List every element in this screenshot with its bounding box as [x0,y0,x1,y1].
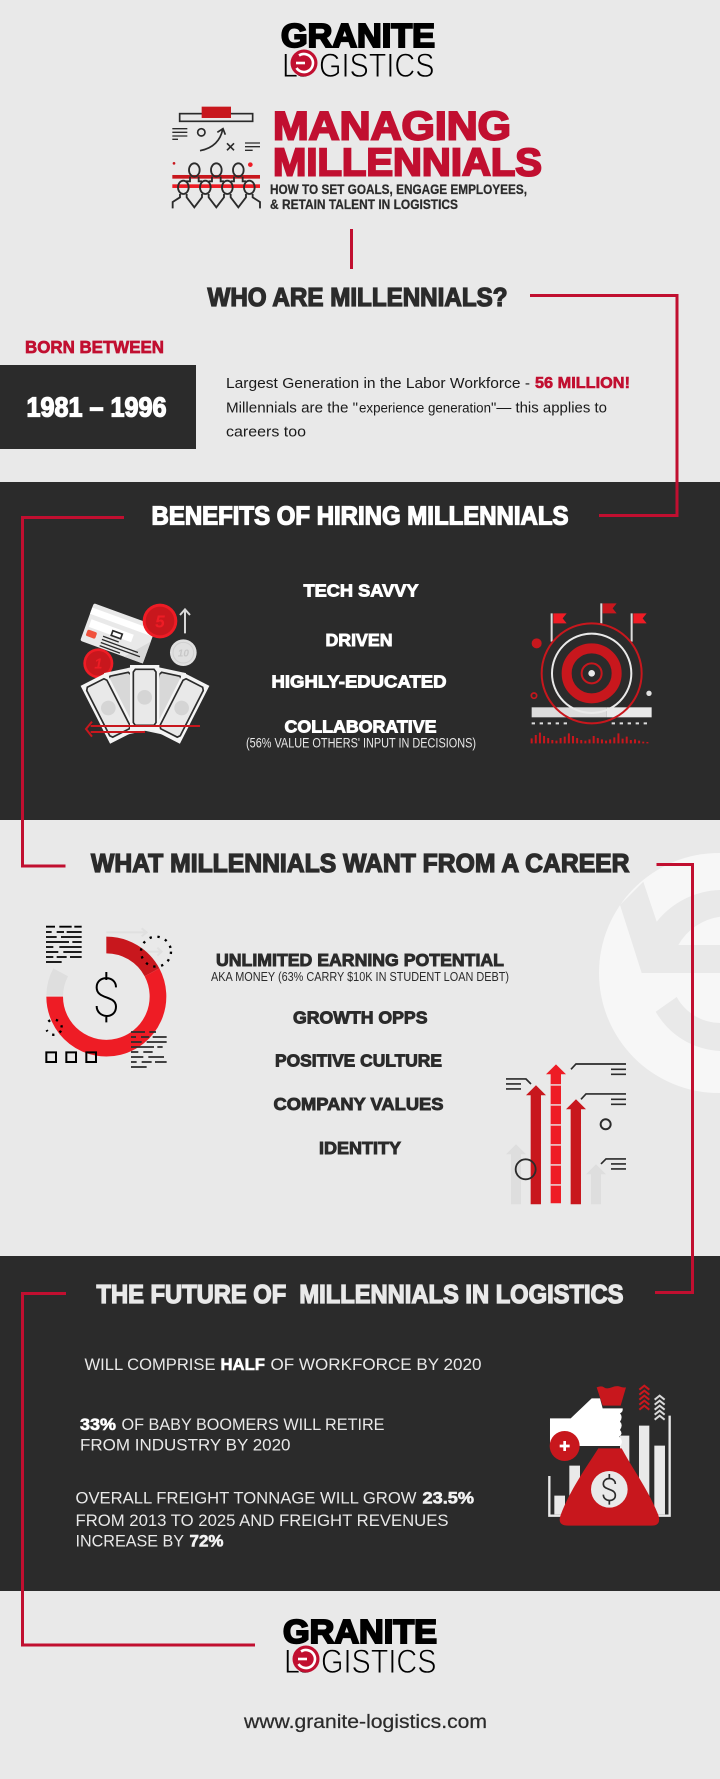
text block: baby boomers: 33% [80,1415,116,1434]
connector: title to section one [350,229,353,269]
icon: target with flags [531,603,652,743]
logo: top [281,17,435,85]
text block: freight growth: 72% [190,1532,224,1550]
text block: who description: 56 MILLION! [535,375,630,392]
panel: birth years: 1981 – 1996 [26,392,166,422]
icon: cards, coins and cash: 10 [178,649,189,660]
icon: team and playbook [172,107,260,208]
subtitle [270,182,527,212]
text block: freight growth [76,1488,474,1550]
title [273,104,542,184]
label: born between: BORN BETWEEN [25,337,164,357]
logo: footer: GRANITE [283,1613,437,1650]
title: MANAGING [273,104,511,148]
text block: baby boomers: FROM INDUSTRY BY 2020 [80,1436,290,1454]
logo: top: GRANITE [281,17,435,54]
text block: baby boomers: OF BABY BOOMERS WILL RETIRE [122,1415,384,1434]
list: career wants: UNLIMITED EARNING POTENTIAL [216,950,504,970]
title: MILLENNIALS [273,142,542,184]
panel: future dark band [0,1256,720,1591]
connector: career to future [655,864,692,1292]
connector: benefits to career [22,518,124,866]
list: career wants: GROWTH OPPS [293,1008,428,1028]
heading: what millennials want: WHAT MILLENNIALS WANT FROM A CAREER [91,850,630,878]
list: career wants: IDENTITY [319,1138,401,1158]
list: benefits: DRIVEN [326,630,392,650]
text block: freight growth: FROM 2013 TO 2025 AND FREIGHT REVENUES [76,1511,448,1530]
text block: who description: Largest Generation in the Labor Workforce - [226,375,530,392]
text block: workforce half: OF WORKFORCE BY 2020 [270,1355,482,1374]
icon: cards, coins and cash: 5 [155,611,165,631]
text block: freight growth: INCREASE BY [76,1532,184,1550]
list: career wants: POSITIVE CULTURE [275,1050,442,1070]
text block: who description: careers too [226,424,306,440]
watermark: logo swirl [599,853,720,1093]
subtitle: HOW TO SET GOALS, ENGAGE EMPLOYEES, [270,182,527,197]
text block: workforce half: HALF [220,1355,265,1374]
panel: benefits dark band [0,482,720,820]
list: benefits: (56% VALUE OTHERS' INPUT IN DECISIONS) [246,736,476,750]
icon: cards, coins and cash: 1 [94,657,102,673]
heading: benefits: BENEFITS OF HIRING MILLENNIALS [152,502,568,530]
logo: footer: LOGISTICS [284,1642,437,1681]
list: benefits: COLLABORATIVE [284,716,436,736]
text block: who description: experience generation [359,400,491,416]
list: career wants [211,950,509,1158]
list: career wants: COMPANY VALUES [274,1094,444,1114]
heading: who are millennials: WHO ARE MILLENNIALS? [208,284,508,312]
text block: workforce half: WILL COMPRISE [84,1355,216,1374]
heading: future of millennials: THE FUTURE OF MILLENNIALS IN LOGISTICS [96,1281,624,1309]
list: benefits: TECH SAVVY [304,580,419,600]
text block: who description: "— this applies to [491,400,607,416]
icon: dollar donut chart [46,927,171,1067]
connector: who to benefits [530,296,677,516]
icon: money bag and bar chart [549,1386,670,1526]
text block: workforce half [84,1355,482,1374]
subtitle: & RETAIN TALENT IN LOGISTICS [270,197,458,212]
list: benefits [246,580,476,750]
logo: footer [283,1613,437,1681]
icon: rising arrows [506,1064,626,1204]
text block: who description [226,375,630,440]
text block: who description: Millennials are the " [226,400,358,416]
text block: freight growth: OVERALL FREIGHT TONNAGE WILL GROW [76,1488,416,1508]
icon: cards, coins and cash [80,603,209,744]
text block: baby boomers [80,1415,384,1454]
panel: birth years [0,365,196,449]
connector: future to footer [22,1294,255,1645]
text block: freight growth: 23.5% [422,1488,474,1508]
list: career wants: AKA MONEY (63% CARRY $10K IN STUDENT LOAN DEBT) [211,969,509,984]
logo: top: LOGISTICS [282,46,435,85]
list: benefits: HIGHLY-EDUCATED [272,672,446,692]
footer url: www.granite-logistics.com [243,1711,487,1733]
